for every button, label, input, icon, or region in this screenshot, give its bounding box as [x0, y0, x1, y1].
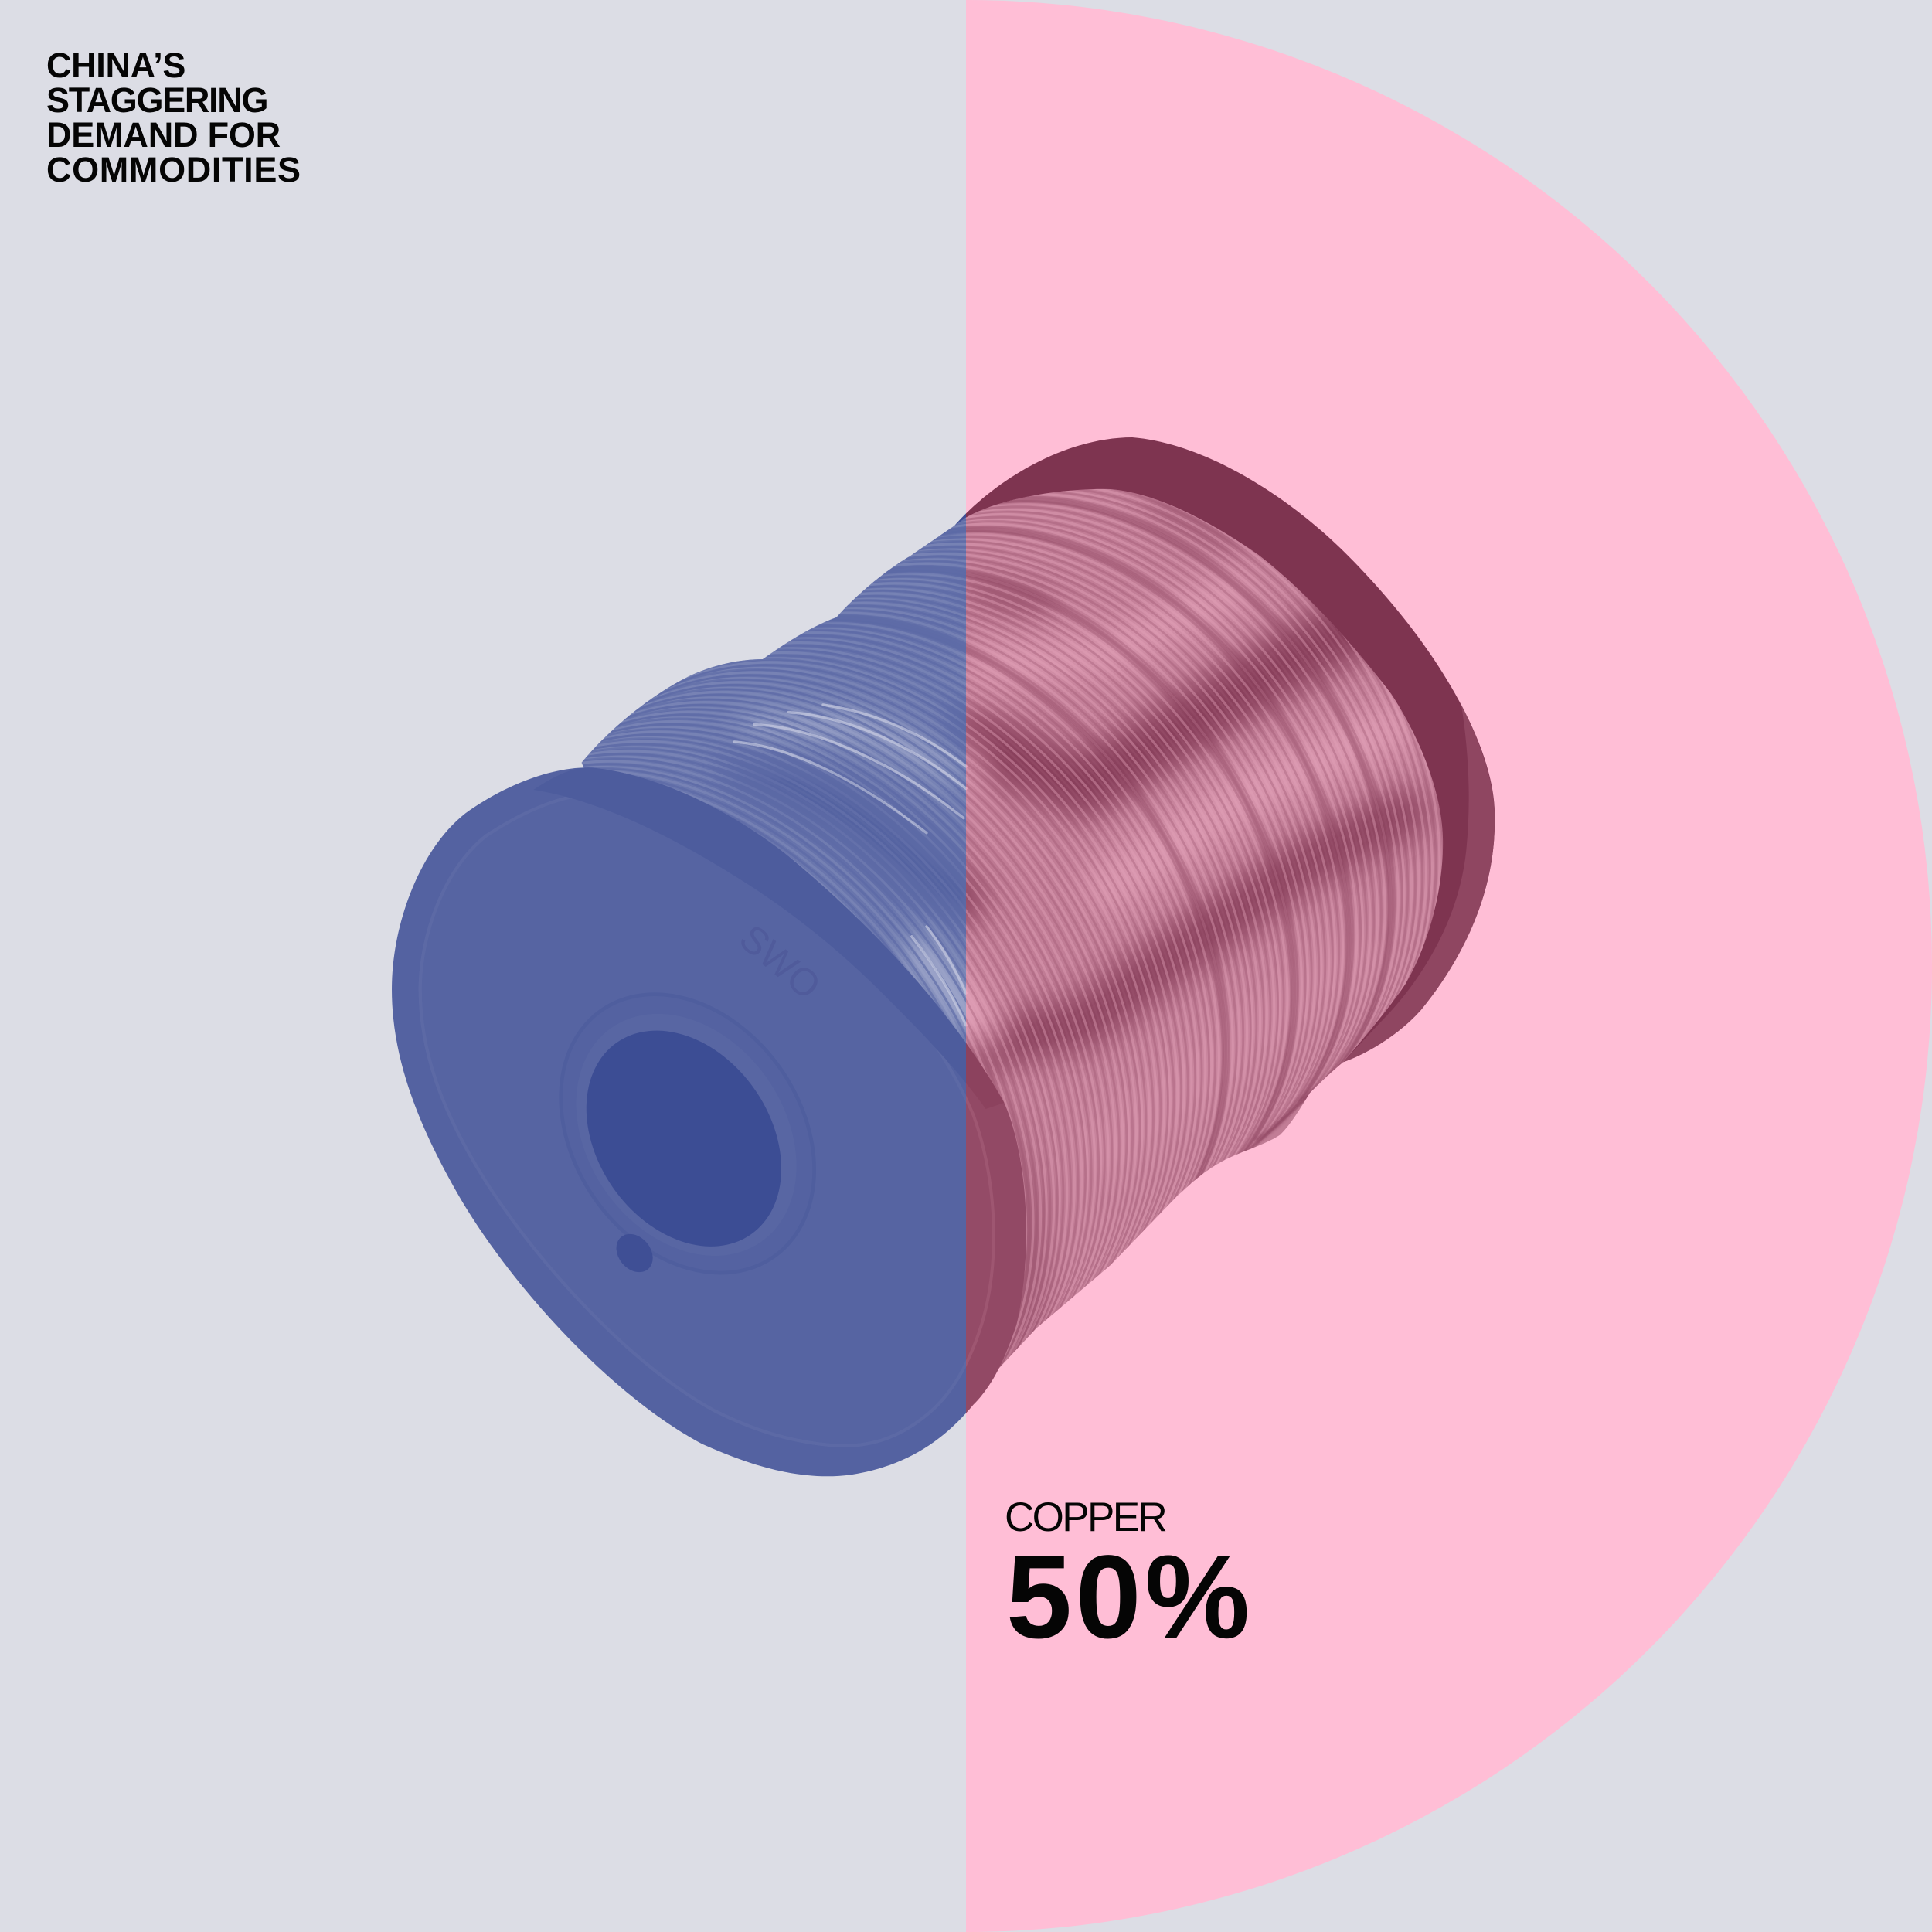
title: [46, 46, 301, 189]
pink semicircle: 50% share: [966, 0, 1932, 1932]
percentage value: 50%: [1006, 1531, 1253, 1663]
commodity name: COPPER: [1005, 1495, 1165, 1540]
title: COMMODITIES: [46, 150, 301, 189]
title: CHINA’S: [46, 46, 185, 85]
title: STAGGERING: [46, 80, 267, 120]
icon: copper wire spool, duotone blue and red: [392, 437, 1495, 1476]
embossed spool mark: SWO: [731, 917, 828, 1008]
title: DEMAND FOR: [46, 115, 281, 155]
callout: copper share: [1005, 1495, 1253, 1663]
